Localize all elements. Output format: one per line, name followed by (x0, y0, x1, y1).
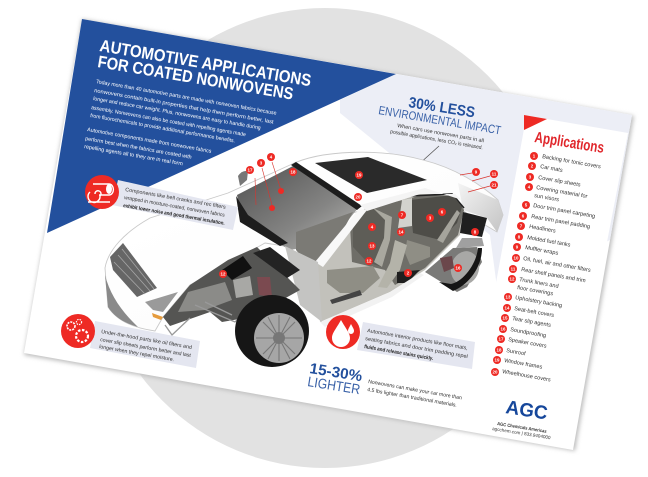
applications list: Molded fuel tanks (527, 235, 571, 249)
applications list: 14 (505, 306, 510, 311)
cabin floor (316, 193, 464, 322)
rear deck (458, 183, 503, 232)
applications list: 19 (495, 358, 500, 363)
applications list: 18 (497, 348, 502, 353)
car part markers: 14 (399, 230, 404, 235)
engine bay (163, 247, 300, 335)
callout: under-the-hood: Under-the-hood parts like oil filters and (101, 329, 192, 351)
title: AUTOMOTIVE APPLICATIONS (98, 36, 313, 90)
applications list: 9 (516, 245, 519, 250)
arrow to car (415, 146, 439, 167)
callout: interior fluids (326, 315, 475, 369)
applications list: 11 (511, 267, 516, 272)
mirror (238, 171, 248, 186)
applications list: 4 (528, 185, 531, 190)
red corner triangle (524, 115, 547, 130)
icon: fabric roll (85, 175, 119, 209)
callout: interior fluids: Automotive interior products like floor mats, (367, 328, 468, 352)
intro text: perform best when the fabrics are coated with (85, 136, 192, 161)
callout: heat and noise: Components like bell cranks and rec filters (125, 187, 227, 211)
applications list: Backing for tonic covers (542, 154, 601, 170)
title: FOR COATED NONWOVENS (96, 52, 295, 104)
applications list: Headliners (529, 224, 556, 235)
front seat (327, 208, 392, 293)
car part markers: 21 (492, 183, 497, 188)
car part markers: 13 (370, 244, 375, 249)
applications list: Door trim panel carpeting (533, 203, 596, 220)
car part markers: 12 (367, 259, 372, 264)
roof edge dark (291, 162, 362, 210)
stat: 15-30% lighter: 15-30% (308, 360, 363, 385)
applications list (491, 152, 601, 384)
applications list: Speaker covers (508, 337, 547, 350)
applications list: 15 (503, 316, 508, 321)
windshield (237, 166, 358, 250)
sunroof (315, 157, 427, 193)
car part markers: 4 (270, 155, 273, 160)
car part markers: 12 (221, 272, 226, 277)
applications list: Trunk liners and (519, 277, 559, 290)
intro text: Today more than 40 automotive parts are made with nonwoven fabrics because (96, 79, 277, 117)
AGC logo (492, 397, 551, 440)
intro text: nonwovens contain built-in properties that help them perform better, last (94, 88, 274, 126)
car part markers: 9 (475, 170, 478, 175)
rear floor (397, 270, 420, 283)
car part markers: 19 (357, 173, 362, 178)
centre pillar (398, 198, 412, 228)
car part markers: 6 (441, 210, 444, 215)
intro text: longer and reduce car weight. Plus, nonwovens are easy to handle during (93, 96, 261, 131)
applications list: 7 (520, 224, 523, 229)
roof strip (360, 188, 462, 211)
car part markers: 7 (401, 213, 404, 218)
applications list: 6 (522, 214, 525, 219)
headlight (145, 292, 178, 312)
callout: heat and noise: exhibit lower noise and good thermal insulation. (123, 203, 226, 227)
intro text: assembly. Nonwovens can also be coated with repelling agents made (91, 105, 246, 138)
callout: interior fluids: seating fabrics and door trim padding repel (365, 336, 468, 360)
applications list: Tear slip agents (512, 316, 551, 329)
intro text: Automotive components made from nonwoven fabrics (87, 127, 212, 155)
applications list: 1 (533, 154, 536, 159)
callout: heat and noise: wrapped in moisture-coated, nonwoven fabrics (124, 195, 226, 219)
a pillar (315, 208, 367, 267)
applications list: floor coverings (517, 285, 554, 297)
applications list: Sunroof (506, 348, 526, 357)
background circle (95, 8, 555, 468)
applications list: 17 (499, 337, 504, 342)
car part markers: 18 (291, 170, 296, 175)
intro text: repelling agents all to they are in real form (84, 144, 184, 167)
applications list: Rear shelf panels and trim (521, 267, 586, 284)
applications list: Window frames (504, 358, 543, 371)
firewall (285, 246, 322, 322)
car part markers: 3 (260, 161, 263, 166)
stat: 30% less: possible applications, less CO₂ is released. (390, 129, 483, 151)
applications list: Car mats (540, 164, 563, 174)
trunk well (460, 212, 487, 237)
AGC logo: AGC (504, 397, 549, 425)
centre console (378, 240, 407, 288)
car part markers: 17 (248, 168, 253, 173)
rear wheel (425, 238, 484, 292)
intro text (84, 79, 277, 167)
intro text: from fluorochemicals to provide additional performance benefits. (90, 113, 235, 144)
front wheel (235, 295, 309, 367)
applications list: 8 (518, 235, 521, 240)
amber marker (152, 313, 163, 320)
callout: under-the-hood: cover slip sheets perform better and last (100, 337, 192, 359)
AGC logo: AGC Chemicals Americas (497, 421, 547, 434)
applications list: 10 (514, 256, 519, 261)
applications list: 20 (493, 370, 498, 375)
lavender background panel (340, 74, 632, 295)
door sill (320, 273, 424, 327)
applications list: 13 (506, 295, 511, 300)
car part markers: 16 (456, 266, 461, 271)
car body (105, 152, 503, 331)
applications list: 3 (529, 175, 532, 180)
callout: interior fluids: fluids and release stains quickly. (364, 344, 434, 362)
stat: 15-30% lighter: LIGHTER (307, 373, 361, 397)
car part markers: 4 (371, 225, 374, 230)
stat: 15-30% lighter (307, 360, 462, 409)
applications list: Upholstery backing (515, 295, 563, 309)
windshield base (236, 196, 288, 246)
rear seat (405, 195, 462, 265)
grille (110, 243, 157, 297)
applications list: Soundproofing (510, 327, 547, 339)
icon: gears (61, 314, 95, 348)
blue header panel (47, 19, 396, 233)
car part markers: 2 (407, 271, 410, 276)
applications list: Cover slip sheets (538, 175, 581, 188)
stat: 15-30% lighter: 4.5 lbs lighter than traditional materials. (367, 387, 457, 409)
callout: under-the-hood (61, 314, 200, 368)
applications list: Oil, fuel, air and other filters (523, 256, 591, 274)
car illustration (105, 152, 503, 367)
applications list: sun visors (534, 193, 560, 203)
dashboard (296, 212, 353, 262)
icon: water drops (326, 315, 360, 349)
applications list: Rear trim panel padding (531, 214, 590, 230)
stat: 15-30% lighter: Nonwovens can make your car more than (368, 379, 462, 401)
car part markers: 11 (492, 172, 497, 177)
cabin shadow (350, 195, 464, 285)
car part markers: 3 (429, 216, 432, 221)
applications panel (478, 115, 628, 398)
applications heading: Applications (533, 129, 605, 157)
stat: 30% less: When cars use nonwoven parts in all (397, 123, 484, 144)
AGC logo: agcchem.com | 833.9404000 (492, 426, 551, 440)
applications list: 16 (501, 327, 506, 332)
applications list: Muffler wraps (525, 245, 559, 257)
callout: under-the-hood: longer when they repel moisture. (99, 344, 175, 363)
applications list: Covering material for (536, 185, 588, 200)
applications list: 12 (510, 277, 515, 282)
car part markers: 20 (356, 195, 361, 200)
stat: 30% less (378, 94, 503, 151)
callout: heat and noise (85, 175, 238, 230)
car part markers (219, 153, 498, 278)
applications list: Seat-belt covers (514, 306, 555, 319)
cowl (253, 247, 300, 278)
applications list: Wheelhouse covers (502, 369, 551, 384)
applications list: 2 (531, 164, 534, 169)
front bumper shade (105, 275, 138, 327)
car part markers: 8 (474, 230, 477, 235)
interior top edge (365, 194, 464, 210)
stat: 30% less: ENVIRONMENTAL IMPACT (378, 103, 503, 138)
applications list: 5 (525, 203, 528, 208)
stat: 30% less: 30% LESS (407, 94, 476, 121)
